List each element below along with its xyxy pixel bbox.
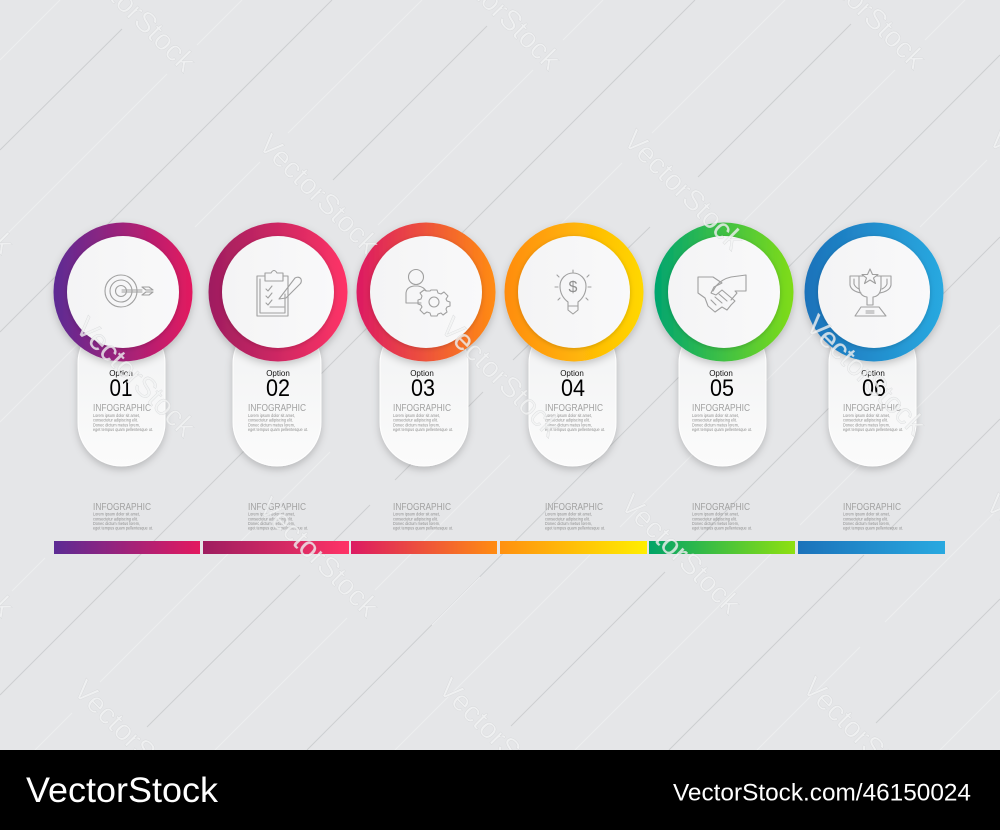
text block 03: Lorem ipsum dolor sit amet, (393, 413, 440, 418)
bottom text block: column 3: INFOGRAPHIC (393, 502, 451, 513)
pill card 03 (380, 320, 468, 466)
disc 03 (370, 236, 482, 348)
text block 02 (248, 403, 308, 432)
label: option 06: Option (861, 369, 885, 378)
text block 02: eget tempus quam pellentesque ut. (248, 427, 308, 432)
text block 02: INFOGRAPHIC (248, 403, 306, 414)
number 06: 06 (862, 375, 886, 402)
bottom text block: column 6: INFOGRAPHIC (843, 502, 901, 513)
ring 01 (54, 222, 192, 362)
bottom text block: column 3: consectetur adipiscing elit. (393, 516, 438, 521)
bottom text block: column 1: consectetur adipiscing elit. (93, 516, 138, 521)
text block 05: consectetur adipiscing elit. (692, 418, 737, 423)
panel: option 01 (54, 222, 192, 466)
text block 05: Lorem ipsum dolor sit amet, (692, 413, 739, 418)
text block 05: eget tempus quam pellentesque ut. (692, 427, 752, 432)
text block 02: consectetur adipiscing elit. (248, 418, 293, 423)
text block 06: Lorem ipsum dolor sit amet, (843, 413, 890, 418)
icon: handshake (698, 275, 746, 312)
disc 06 (818, 236, 930, 348)
number 02: 02 (266, 375, 290, 402)
text block 05: Donec dictum metus lorem, (692, 422, 739, 427)
text block 04: eget tempus quam pellentesque ut. (545, 427, 605, 432)
text block 03: consectetur adipiscing elit. (393, 418, 438, 423)
bottom text block: column 1: eget tempus quam pellentesque ut. (93, 526, 153, 531)
text block 04: INFOGRAPHIC (545, 403, 603, 414)
text block 01: Lorem ipsum dolor sit amet, (93, 413, 140, 418)
text block 06: INFOGRAPHIC (843, 403, 901, 414)
disc 04 (518, 236, 630, 348)
text block 03: Donec dictum metus lorem, (393, 422, 440, 427)
label: option 02: Option (266, 369, 290, 378)
text block 02: Lorem ipsum dolor sit amet, (248, 413, 295, 418)
text block 04: consectetur adipiscing elit. (545, 418, 590, 423)
bottom text block: column 5 (692, 502, 752, 531)
text block 05 (692, 403, 752, 432)
bottom text block: column 3: Lorem ipsum dolor sit amet, (393, 512, 440, 516)
bottom text block: column 3: Donec dictum metus lorem, (393, 521, 440, 526)
icon: trophy (850, 269, 891, 316)
text block 02: Donec dictum metus lorem, (248, 422, 295, 427)
panel: option 02 (208, 222, 348, 466)
bottom text block: column 4: INFOGRAPHIC (545, 502, 603, 513)
bottom text block: column 2: consectetur adipiscing elit. (248, 516, 293, 521)
bottom text block: column 2: Donec dictum metus lorem, (248, 521, 295, 526)
bottom text block: column 2: INFOGRAPHIC (248, 502, 306, 513)
icon: target with arrow (105, 275, 153, 307)
bottom text block: column 2: eget tempus quam pellentesque ut. (248, 526, 308, 531)
text block 06: consectetur adipiscing elit. (843, 418, 888, 423)
disc 01 (67, 236, 179, 348)
bottom text block: column 4: consectetur adipiscing elit. (545, 516, 590, 521)
bottom text block: column 5: Lorem ipsum dolor sit amet, (692, 512, 739, 516)
icon: clipboard with pencil (257, 270, 301, 316)
ring 06 (804, 222, 944, 362)
ring 04 (504, 222, 644, 362)
panel: option 06 (804, 222, 944, 466)
number 01: 01 (110, 375, 132, 402)
bottom text block: column 2 (248, 502, 308, 531)
bottom text block: column 3 (393, 502, 453, 531)
watermarks: VectorStock (67, 674, 200, 807)
text block 06: Donec dictum metus lorem, (843, 422, 890, 427)
text block 01 (93, 403, 153, 432)
label: option 04: Option (560, 369, 584, 378)
text block 01: INFOGRAPHIC (93, 403, 151, 414)
bottom text block: column 2: Lorem ipsum dolor sit amet, (248, 512, 295, 516)
bottom text block: column 6: Donec dictum metus lorem, (843, 521, 890, 526)
footer logo text: VectorStock (26, 771, 219, 810)
number 04: 04 (561, 375, 585, 402)
bottom text block: column 4: eget tempus quam pellentesque ut. (545, 526, 605, 531)
icon: person with gear (406, 270, 450, 316)
bottom text block: column 1 (93, 502, 153, 531)
text block 03 (393, 403, 453, 432)
text block 06 (843, 403, 903, 432)
bottom text block: column 5: Donec dictum metus lorem, (692, 521, 739, 526)
bottom text block: column 1: Lorem ipsum dolor sit amet, (93, 512, 140, 516)
watermarks: VectorStock (432, 672, 565, 805)
text block 05: INFOGRAPHIC (692, 403, 750, 414)
footer band (0, 750, 1000, 830)
footer image id: VectorStock.com/46150024 (673, 780, 971, 806)
watermarks: VectorStock (69, 311, 202, 444)
disc 05 (668, 236, 780, 348)
number 03: 03 (411, 375, 435, 402)
ring 02 (208, 222, 348, 362)
pill card 05 (679, 320, 766, 466)
text block 04: Lorem ipsum dolor sit amet, (545, 413, 592, 418)
icon: light bulb with dollar (555, 270, 591, 314)
pill card 04 (529, 320, 616, 466)
label: option 03: Option (410, 369, 434, 378)
watermarks: VectorStock (799, 309, 932, 442)
ring 05 (654, 222, 794, 362)
bottom text block: column 5: consectetur adipiscing elit. (692, 516, 737, 521)
watermarks: VectorStock (434, 311, 567, 444)
pill card 02 (233, 320, 321, 466)
bottom text block: column 5: INFOGRAPHIC (692, 502, 750, 513)
watermarks: VectorStock (796, 671, 929, 804)
panel: option 05 (654, 222, 794, 466)
icon: light bulb with dollar: $ (569, 279, 578, 296)
label: option 05: Option (709, 369, 733, 378)
bottom text block: column 6 (843, 502, 903, 531)
number 05: 05 (710, 375, 734, 402)
bottom text block: column 6: Lorem ipsum dolor sit amet, (843, 512, 890, 516)
label: option 01: Option (109, 369, 133, 378)
bottom text block: column 5: eget tempus quam pellentesque ut. (692, 526, 752, 531)
text block 06: eget tempus quam pellentesque ut. (843, 427, 903, 432)
panel: option 04 (504, 222, 644, 466)
ring 03 (356, 222, 496, 362)
text block 01: Donec dictum metus lorem, (93, 422, 140, 427)
text block 01: consectetur adipiscing elit. (93, 418, 138, 423)
watermarks: VectorStock (252, 491, 385, 624)
text block 03: INFOGRAPHIC (393, 403, 451, 414)
text block 04 (545, 403, 605, 432)
watermarks: VectorStock (252, 128, 385, 261)
text block 04: Donec dictum metus lorem, (545, 422, 592, 427)
watermarks: VectorStock (617, 124, 750, 257)
bottom text block: column 4 (545, 502, 605, 531)
watermarks: VectorStock (614, 488, 747, 621)
bottom text block: column 4: Lorem ipsum dolor sit amet, (545, 512, 592, 516)
bottom text block: column 4: Donec dictum metus lorem, (545, 521, 592, 526)
gradient timeline bar (54, 541, 945, 554)
bottom text block: column 3: eget tempus quam pellentesque ut. (393, 526, 453, 531)
bottom text block: column 1: Donec dictum metus lorem, (93, 521, 140, 526)
disc 02 (222, 236, 334, 348)
bottom text block: column 6: eget tempus quam pellentesque ut. (843, 526, 903, 531)
pill card 06 (829, 320, 916, 466)
text block 03: eget tempus quam pellentesque ut. (393, 427, 453, 432)
pill card 01 (78, 320, 165, 466)
text block 01: eget tempus quam pellentesque ut. (93, 427, 153, 432)
bottom text block: column 6: consectetur adipiscing elit. (843, 516, 888, 521)
bottom text block: column 1: INFOGRAPHIC (93, 502, 151, 513)
panel: option 03 (356, 222, 496, 466)
